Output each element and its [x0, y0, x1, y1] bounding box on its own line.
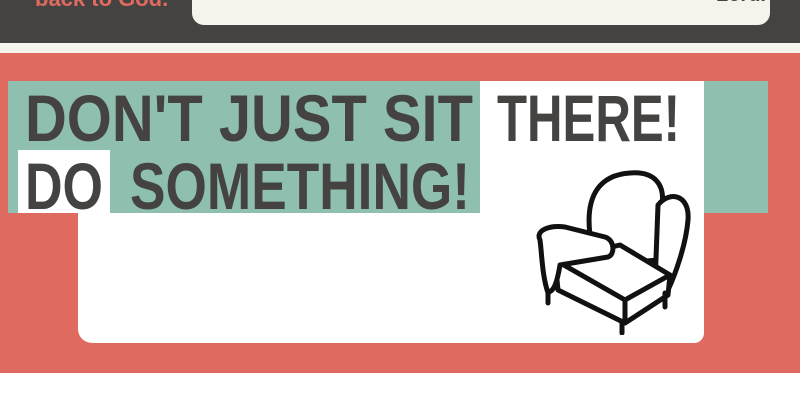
headline: THERE! — [497, 81, 680, 155]
cream box — [192, 0, 770, 25]
headline: SOMETHING! — [130, 149, 470, 223]
headline: DO — [25, 149, 103, 223]
top dark band — [0, 0, 800, 43]
icon: armchair — [536, 170, 691, 335]
white card — [78, 81, 704, 343]
red panel — [0, 53, 800, 373]
headline: DON'T JUST SIT — [25, 81, 473, 155]
